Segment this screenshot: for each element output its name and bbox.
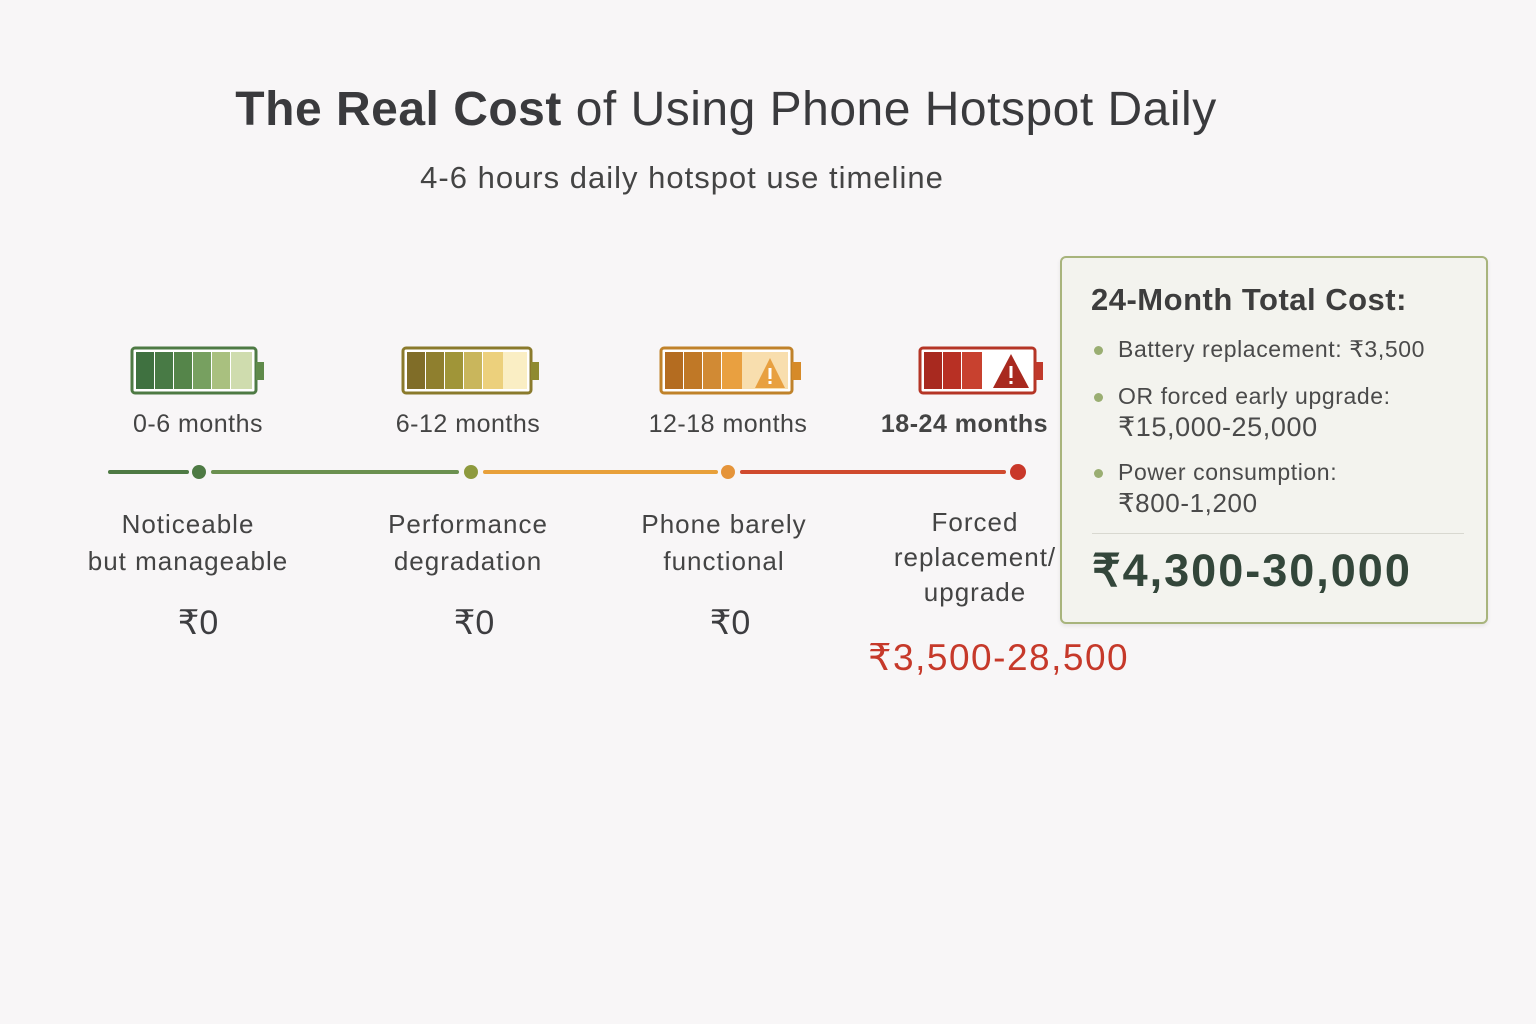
icon: battery red warning [918, 346, 1043, 394]
bullet list: Battery replacement: ₹3,500 [1118, 336, 1425, 362]
descriptions: Noticeable [122, 509, 254, 539]
descriptions [88, 509, 288, 576]
text: 6-12 months [396, 410, 540, 438]
bullet list: OR forced early upgrade: [1118, 383, 1391, 409]
text: ₹0 [710, 604, 750, 642]
text: 18-24 months [881, 410, 1048, 438]
text: Forced [932, 507, 1018, 537]
timeline [108, 464, 1026, 480]
bullet list: Power consumption: [1118, 459, 1337, 485]
bullet list: ₹15,000-25,000 [1118, 412, 1318, 442]
text: 12-18 months [649, 410, 807, 438]
total: ₹4,300-30,000 [1092, 545, 1412, 596]
text: replacement/ [894, 542, 1056, 572]
text: Performance [388, 509, 548, 539]
bullet list: ₹800-1,200 [1118, 488, 1258, 518]
text: degradation [394, 546, 542, 576]
icon: battery green [130, 346, 264, 394]
text: upgrade [924, 577, 1026, 607]
subtitle: 4-6 hours daily hotspot use timeline [420, 160, 944, 195]
icon: battery olive [402, 346, 539, 394]
text: ₹3,500-28,500 [868, 637, 1129, 678]
text: Phone barely [641, 509, 807, 539]
title: The Real Cost of Using Phone Hotspot Daily [235, 83, 1217, 136]
text: functional [663, 546, 785, 576]
panel heading: 24-Month Total Cost: [1091, 282, 1407, 317]
bullet list [1094, 336, 1425, 518]
text: ₹0 [454, 604, 494, 642]
descriptions: but manageable [88, 546, 288, 576]
panel: 24-month total cost [1060, 256, 1488, 624]
period labels: 0-6 months [133, 410, 263, 438]
costs: ₹0 [178, 604, 218, 642]
icon: battery orange warning [660, 346, 801, 394]
